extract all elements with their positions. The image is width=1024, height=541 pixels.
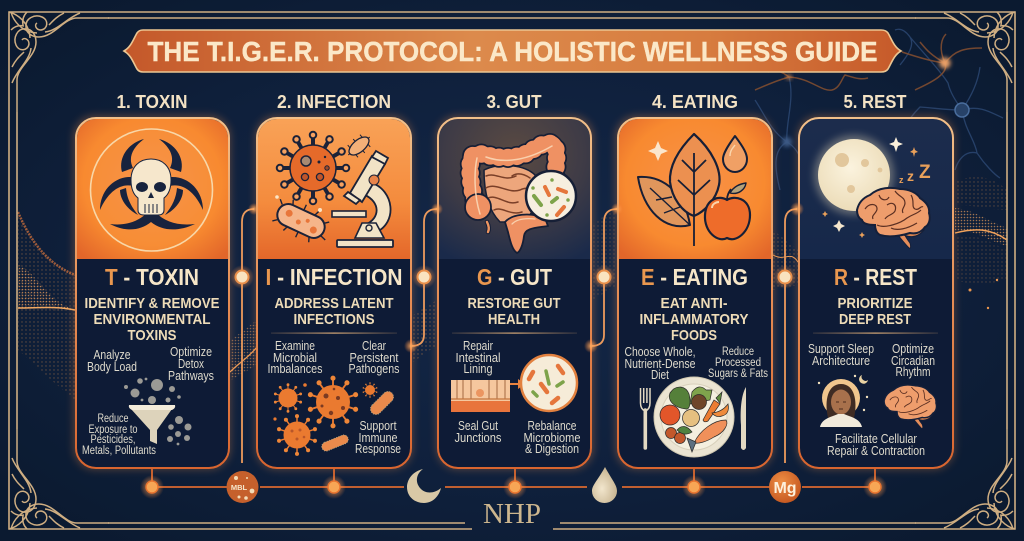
subheading: gut: RESTORE GUT: [468, 295, 560, 312]
icon: leaves, drop and apple: [638, 134, 750, 246]
text: reduce exposure: Metals, Pollutants: [82, 445, 156, 457]
icon: moon and brain: z: [899, 175, 904, 185]
text: reduce processed: Processed: [715, 357, 761, 369]
text: rebalance: Rebalance: [528, 419, 577, 433]
text: clear: Pathogens: [348, 362, 400, 376]
text: choose whole: [624, 345, 696, 382]
text: reduce processed: Reduce: [722, 346, 754, 358]
background particle waves: [18, 177, 1007, 400]
text: repair lining: Lining: [464, 362, 493, 376]
column labels: 4. EATING: [652, 92, 738, 112]
text: optimize circadian: Optimize: [892, 342, 934, 356]
subheading: rest: [838, 295, 912, 328]
text: repair lining: [456, 339, 500, 376]
column labels: 1. TOXIN: [116, 92, 188, 112]
text: optimize detox pathways: Detox: [178, 357, 205, 371]
icon: virus and microscope: [268, 130, 393, 249]
text: examine: Examine: [275, 339, 315, 353]
title banner: [124, 30, 901, 72]
heading: T - Toxin: T - TOXIN: [105, 264, 199, 290]
text: facilitate repair: [827, 432, 925, 458]
column labels: 2. INFECTION: [277, 92, 391, 112]
icon: sleeping person: [818, 375, 868, 427]
icon: funnel with particles: [124, 378, 192, 445]
text: analyze body load: [87, 348, 137, 374]
text: examine: Imbalances: [268, 362, 322, 376]
text: optimize circadian: [891, 342, 935, 379]
subheading: eating: FOODS: [671, 327, 717, 344]
text: choose whole: Choose Whole,: [624, 345, 696, 359]
subheading: eating: INFLAMMATORY: [640, 311, 748, 328]
text: support sleep: Architecture: [812, 354, 870, 368]
text: support sleep: Support Sleep: [808, 342, 874, 356]
text: rebalance: Microbiome: [524, 431, 581, 445]
text: clear: [348, 339, 400, 376]
icon: moon and brain: z: [907, 168, 914, 184]
virus: [280, 135, 346, 201]
column labels: [116, 92, 906, 112]
heading: E - Eating: E - EATING: [641, 264, 748, 290]
text: clear: Persistent: [350, 351, 399, 365]
background neuron network: [755, 29, 1003, 190]
text: support immune: Immune: [358, 431, 398, 445]
text: reduce processed: [708, 346, 768, 380]
text: analyze body load: Body Load: [87, 360, 137, 374]
logo: NHP: NHP: [483, 498, 541, 530]
vertical connector nodes: [230, 202, 804, 353]
subheading: rest: DEEP REST: [839, 311, 911, 328]
heading: G - Gut: G - GUT: [477, 264, 552, 290]
panel: gut: [438, 118, 591, 468]
subheading: infection: INFECTIONS: [294, 311, 374, 328]
text: examine: [268, 339, 322, 376]
badge: MBL: [226, 471, 258, 503]
text: facilitate repair: Repair & Contraction: [827, 444, 925, 458]
column labels: 3. GUT: [486, 92, 542, 112]
icon: moon and brain: [814, 135, 931, 248]
subheading: infection: [274, 295, 394, 328]
panel: rest: [799, 118, 953, 468]
large intestine: [470, 143, 557, 208]
timeline nodes: [140, 475, 887, 499]
subheading: toxin: [84, 295, 220, 344]
text: optimize circadian: Rhythm: [896, 365, 930, 379]
subheading: gut: HEALTH: [488, 311, 540, 328]
text: optimize detox pathways: Optimize: [170, 345, 212, 359]
text: clear: Clear: [362, 339, 386, 353]
icon: gut lining tissue: [451, 379, 525, 412]
text: examine: Microbial: [273, 351, 317, 365]
text: rebalance: & Digestion: [525, 442, 579, 456]
icon: intestines with microbe lens: [465, 143, 576, 253]
text: repair lining: Intestinal: [456, 351, 500, 365]
subheading: gut: [468, 295, 560, 328]
icon: pathogens: [273, 378, 396, 454]
subheading: toxin: TOXINS: [128, 327, 176, 344]
text: analyze body load: Analyze: [94, 348, 131, 362]
heading: R - Rest: R - REST: [834, 264, 917, 290]
text: seal gut: Seal Gut: [458, 419, 498, 433]
panel: infection: [257, 118, 411, 468]
text: seal gut: [454, 419, 502, 445]
microscope: [332, 151, 393, 247]
text: support immune: [355, 419, 401, 456]
card glows: [73, 115, 955, 470]
heading: I - Infection: I - INFECTION: [266, 264, 402, 290]
subheading: toxin: ENVIRONMENTAL: [94, 311, 210, 328]
panel: toxin: [76, 118, 229, 468]
text: seal gut: Junctions: [454, 431, 502, 445]
badge: MBL: MBL: [231, 483, 248, 492]
icon: moon and brain: Z: [919, 162, 931, 183]
subheading: infection: ADDRESS LATENT: [274, 295, 394, 312]
text: repair lining: Repair: [463, 339, 493, 353]
column labels: 5. REST: [844, 92, 906, 112]
text: choose whole: Diet: [651, 368, 669, 382]
text: reduce exposure: [82, 413, 156, 457]
subheading: toxin: IDENTIFY & REMOVE: [84, 295, 220, 312]
microbe lens: [526, 171, 576, 221]
text: rebalance: [524, 419, 581, 456]
subheading: eating: EAT ANTI-: [660, 295, 728, 312]
small intestine: [484, 165, 540, 222]
small bacterium: [342, 130, 376, 162]
badge: Mg: Mg: [773, 480, 797, 497]
subheading: eating: [640, 295, 748, 344]
icon: crescent moon: [407, 469, 441, 503]
timeline connectors: [152, 209, 875, 487]
icon: microbiome circle: [521, 355, 577, 411]
text: optimize detox pathways: [168, 345, 214, 383]
icon: plate of food: [640, 377, 746, 457]
text: support immune: Response: [355, 442, 401, 456]
text: reduce exposure: Pesticides,: [90, 434, 136, 446]
text: facilitate repair: Facilitate Cellular: [835, 432, 917, 446]
text: optimize detox pathways: Pathways: [168, 369, 214, 383]
bacterium: [268, 194, 335, 249]
icon: biohazard skull: [90, 129, 212, 251]
subheading: rest: PRIORITIZE: [838, 295, 912, 312]
badge: Mg: [769, 471, 801, 503]
text: optimize circadian: Circadian: [891, 354, 935, 368]
text: reduce processed: Sugars & Fats: [708, 368, 768, 380]
text: choose whole: Nutrient-Dense: [624, 357, 696, 371]
text: support sleep: [808, 342, 874, 368]
text: reduce exposure: Reduce: [98, 413, 128, 425]
title: THE T.I.G.E.R. PROTOCOL: A HOLISTIC WELLNESS GUIDE: [148, 36, 878, 67]
icon: water drop: [592, 467, 617, 503]
panel: eating: [618, 118, 772, 468]
icon: brain: [884, 385, 936, 428]
text: reduce exposure: Exposure to: [88, 424, 138, 436]
text: support immune: Support: [360, 419, 397, 433]
